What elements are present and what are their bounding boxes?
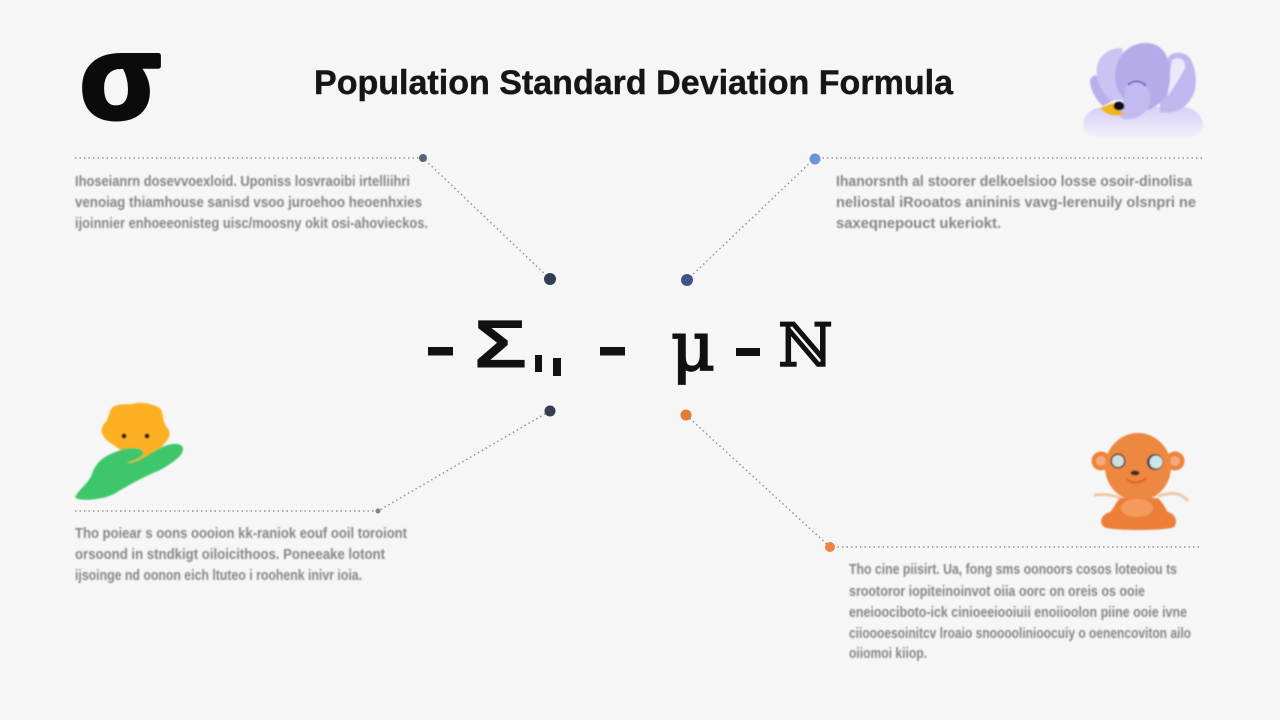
marker: bottom-left outer dot bbox=[376, 508, 380, 514]
leader line: top-left bbox=[75, 158, 550, 279]
leader line: top-right bbox=[687, 158, 1202, 280]
subscript marks bbox=[535, 355, 561, 376]
minus sign two bbox=[600, 347, 625, 356]
panel: bottom-left note bbox=[75, 406, 556, 584]
text block: bottom-left: ijsoinge nd oonon eich ltuteo i roohenk inivr ioia. bbox=[75, 568, 362, 584]
summation sign: Σ bbox=[474, 305, 527, 382]
text block: bottom-left bbox=[75, 526, 407, 584]
icon: sigma symbol: σ bbox=[80, 12, 161, 144]
marker: top-left outer dot bbox=[419, 154, 427, 162]
text block: bottom-right: Tho cine piisirt. Ua, fong sms oonoors cosos loteoiou ts bbox=[849, 562, 1177, 578]
icon: orange monkey bbox=[1092, 433, 1188, 530]
text block: top-left: Ihoseianrn dosevvoexloid. Uponiss losvraoibi irtelliihri bbox=[75, 174, 410, 190]
icon: purple elephant bbox=[1083, 43, 1203, 137]
text block: bottom-right: eneioociboto-ick cinioeeiooiuii enoiioolon piine ooie ivne bbox=[849, 605, 1187, 621]
panel: top-left note bbox=[75, 154, 556, 285]
text block: top-left bbox=[75, 174, 428, 232]
text block: top-right: saxeqnepouct ukeriokt. bbox=[836, 216, 1001, 232]
leader line: bottom-right bbox=[686, 415, 1199, 547]
text block: top-right: Ihanorsnth al stoorer delkoelsioo losse osoir-dinolisa bbox=[836, 174, 1193, 190]
text block: bottom-right: oiiomoi kiiop. bbox=[849, 646, 927, 662]
marker: bottom-left inner dot bbox=[544, 406, 556, 416]
mu symbol: μ bbox=[671, 308, 715, 387]
title: Population Standard Deviation Formula bbox=[314, 64, 954, 102]
text block: top-right: neliostal iRooatos anininis vavg-lerenuily olsnpri ne bbox=[836, 195, 1196, 211]
text block: bottom-right bbox=[849, 562, 1191, 662]
formula bbox=[428, 305, 833, 387]
marker: top-right outer dot bbox=[810, 154, 820, 164]
text block: top-left: ijoinnier enhoeeonisteg uisc/moosny okit osi-ahovieckos. bbox=[75, 216, 428, 232]
marker: bottom-right inner dot bbox=[680, 410, 692, 420]
marker: top-right inner dot bbox=[681, 274, 693, 286]
icon: yellow creature on green leaf bbox=[75, 403, 183, 500]
marker: bottom-right outer dot bbox=[825, 542, 835, 552]
marker: top-left inner dot bbox=[544, 273, 556, 285]
minus sign three bbox=[736, 348, 760, 356]
text block: bottom-right: srootoror iopiteinoinvot oiia oorc on oreis os ooie bbox=[849, 584, 1145, 600]
text block: bottom-left: orsoond in stndkigt oiloicithoos. Poneeake lotont bbox=[75, 547, 385, 563]
text block: top-left: venoiag thiamhouse sanisd vsoo juroehoo heoenhxies bbox=[75, 195, 422, 211]
N symbol: ℕ bbox=[778, 311, 833, 381]
leader line: bottom-left bbox=[75, 411, 550, 511]
text block: bottom-left: Tho poiear s oons oooion kk-raniok eouf ooil toroiont bbox=[75, 526, 407, 542]
text block: top-right bbox=[836, 174, 1196, 232]
panel: top-right note bbox=[681, 154, 1202, 286]
minus sign one bbox=[428, 347, 453, 356]
text block: bottom-right: ciioooesoinitcv lroaio snoooolinioocuiy o oenencoviton ailo bbox=[849, 626, 1191, 642]
panel: bottom-right note bbox=[680, 410, 1199, 662]
